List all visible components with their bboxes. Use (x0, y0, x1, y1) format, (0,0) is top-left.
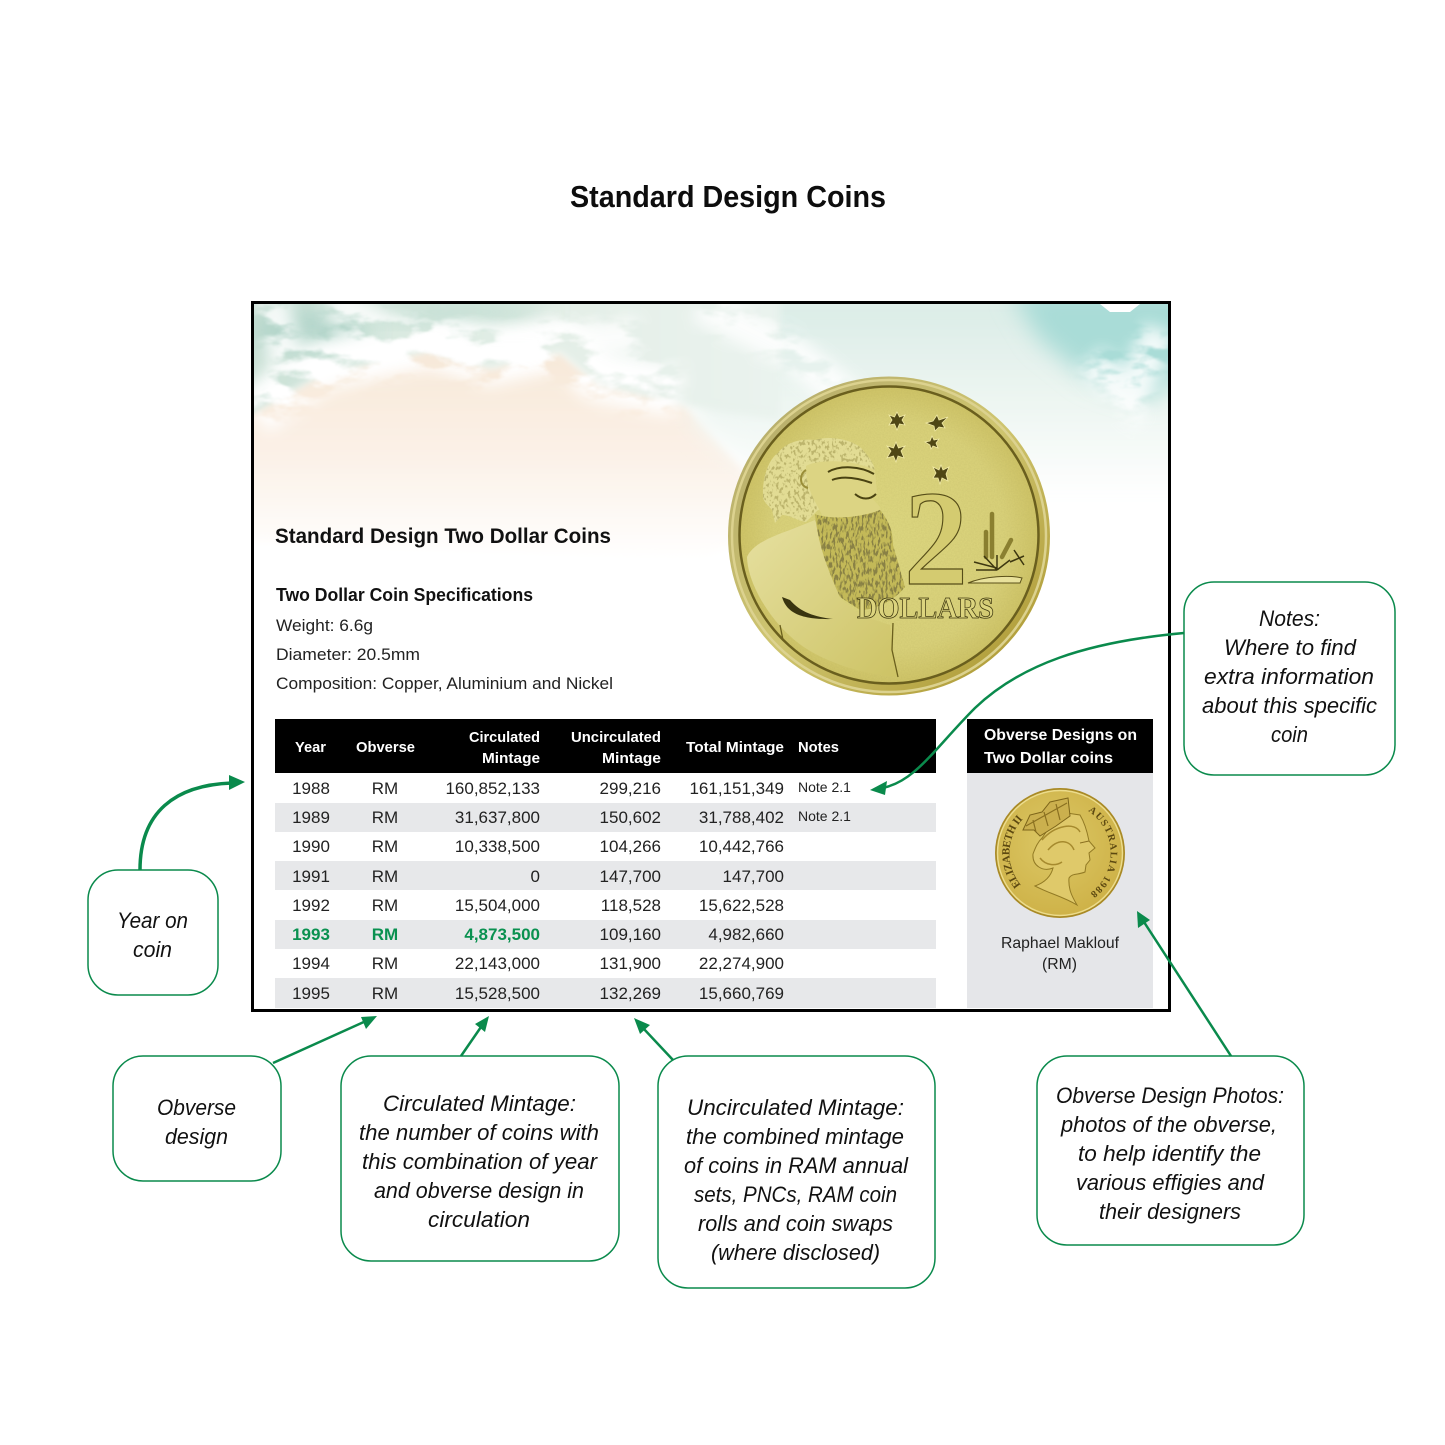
portrait: hair, shoulder, head and beard (747, 438, 905, 677)
row 1991: 0 (531, 867, 540, 886)
row 1993 highlighted: 4,873,500 (464, 925, 540, 944)
row 1994 (292, 954, 784, 973)
callout: circulated mintage: the number of coins with (359, 1120, 599, 1145)
row 1990: 10,338,500 (455, 837, 540, 856)
plant emblem (968, 514, 1024, 583)
row 1989: 31,637,800 (455, 808, 540, 827)
row 1992: RM (372, 896, 398, 915)
row 1995: 15,660,769 (699, 984, 784, 1003)
row 1994: 22,274,900 (699, 954, 784, 973)
callout: notes: Notes: (1259, 606, 1320, 631)
designer caption: Raphael Maklouf (1001, 935, 1120, 952)
row 1988: RM (372, 779, 398, 798)
callout: uncirculated mintage: of coins in RAM annual (684, 1153, 909, 1178)
callout: uncirculated mintage: the combined mintage (686, 1124, 904, 1149)
row 1993 highlighted (275, 920, 936, 949)
callout: obverse design photos: various effigies and (1076, 1170, 1265, 1195)
row 1989: 150,602 (600, 808, 661, 827)
callout: uncirculated mintage (658, 1056, 935, 1288)
row 1995: 15,528,500 (455, 984, 540, 1003)
row 1993 highlighted: RM (372, 925, 398, 944)
callout: year on coin: Year on (117, 908, 188, 933)
callout: circulated mintage: this combination of year (362, 1149, 599, 1174)
callout: obverse design photos (1037, 1056, 1304, 1245)
row 1992: 15,504,000 (455, 896, 540, 915)
row 1989: RM (372, 808, 398, 827)
panel: coin page frame (220, 290, 1200, 1010)
row 1995: 1995 (292, 984, 330, 1003)
stars (887, 412, 949, 484)
callout: notes: extra information (1204, 664, 1374, 689)
row 1988: 1988 (292, 779, 330, 798)
callout: year on coin (88, 870, 218, 995)
table header: Obverse (356, 739, 415, 756)
callout: year on coin: coin (133, 937, 172, 962)
callout: uncirculated mintage: (where disclosed) (711, 1240, 880, 1265)
arrow: obverse (273, 1016, 377, 1063)
row 1991: 1991 (292, 867, 330, 886)
arrow: year (140, 775, 245, 870)
text block: specifications: Composition: Copper, Aluminium and Nickel (276, 674, 613, 693)
row 1992 (292, 896, 784, 915)
row 1995: 132,269 (600, 984, 661, 1003)
text block: specifications: Two Dollar Coin Specifications (276, 585, 533, 605)
row 1991: 147,700 (723, 867, 784, 886)
panel heading: Two Dollar coins (984, 750, 1113, 767)
text block: specifications (276, 585, 613, 693)
arrow: circulated (461, 1016, 489, 1056)
row 1992: 1992 (292, 896, 330, 915)
icon: obverse coin with effigy: AUSTRALIA 1988 (1088, 807, 1118, 898)
row 1990 (292, 837, 784, 856)
row 1990: 10,442,766 (699, 837, 784, 856)
row 1993 highlighted: 1993 (292, 925, 330, 944)
callout: circulated mintage: Circulated Mintage: (383, 1091, 576, 1116)
beach background image (254, 304, 1168, 524)
text block: specifications: Diameter: 20.5mm (276, 645, 420, 664)
row 1988 (292, 779, 851, 798)
row 1994: RM (372, 954, 398, 973)
callout: obverse design photos: photos of the obverse, (1060, 1112, 1277, 1137)
arrow: notes to table (870, 633, 1184, 795)
table header: Mintage (482, 750, 540, 767)
table: mintage by year (275, 719, 936, 1008)
row 1992: 118,528 (601, 896, 661, 915)
row 1995 (275, 978, 936, 1008)
callout: uncirculated mintage: rolls and coin swaps (698, 1211, 893, 1236)
row 1994: 1994 (292, 954, 330, 973)
row 1989: Note 2.1 (798, 808, 851, 824)
heading: standard design two dollar coins: Standard Design Two Dollar Coins (275, 525, 611, 548)
row 1993 highlighted: 4,982,660 (708, 925, 784, 944)
row 1990: RM (372, 837, 398, 856)
frame border (252, 302, 1170, 1010)
row 1990: 104,266 (600, 837, 661, 856)
table header: Mintage (602, 750, 661, 767)
row 1989: 1989 (292, 808, 330, 827)
row 1991 (275, 861, 936, 890)
callout: circulated mintage (341, 1056, 619, 1261)
callout: obverse design photos: to help identify the (1078, 1141, 1261, 1166)
callout: obverse design: design (165, 1124, 228, 1149)
title: Standard Design Coins (570, 179, 886, 214)
main coin: two dollar reverse (728, 376, 1050, 696)
row 1992: 15,622,528 (699, 896, 784, 915)
callout: obverse design (113, 1056, 281, 1181)
designer caption: (RM) (1042, 956, 1077, 973)
row 1988: 161,151,349 (689, 779, 784, 798)
table header: Total Mintage (686, 739, 784, 756)
table header: Circulated (469, 729, 540, 746)
table header: Notes (798, 739, 839, 756)
text block: specifications: Weight: 6.6g (276, 616, 373, 635)
table header: Uncirculated (571, 729, 661, 746)
row 1995: RM (372, 984, 398, 1003)
table header: Year (295, 739, 326, 756)
panel: obverse designs (967, 719, 1153, 1008)
callout: notes: Where to find (1224, 635, 1357, 660)
callout: obverse design photos: their designers (1099, 1199, 1241, 1224)
callout: uncirculated mintage: sets, PNCs, RAM coin (694, 1182, 897, 1207)
callout: obverse design photos: Obverse Design Photos: (1056, 1083, 1284, 1108)
row 1988: Note 2.1 (798, 779, 851, 795)
panel heading: Obverse Designs on (984, 727, 1137, 744)
callout: notes: about this specific (1202, 693, 1377, 718)
row 1990: 1990 (292, 837, 330, 856)
denomination numeral: 2 (904, 464, 968, 614)
callout: obverse design: Obverse (157, 1095, 236, 1120)
arrow: uncirculated (634, 1018, 673, 1060)
icon: obverse coin with effigy (995, 788, 1125, 918)
row 1993 highlighted: 109,160 (600, 925, 661, 944)
row 1989 (275, 803, 936, 832)
row 1994: 131,900 (600, 954, 661, 973)
row 1988: 299,216 (600, 779, 661, 798)
arrow: obverse photos (1137, 911, 1231, 1056)
icon: obverse coin with effigy: ELIZABETH II (1002, 814, 1023, 889)
row 1991: 147,700 (600, 867, 661, 886)
row 1989: 31,788,402 (699, 808, 784, 827)
row 1988: 160,852,133 (445, 779, 540, 798)
row 1994: 22,143,000 (455, 954, 540, 973)
callout: notes (1184, 582, 1395, 775)
panel heading (984, 727, 1137, 767)
callout: uncirculated mintage: Uncirculated Mintage: (687, 1095, 904, 1120)
table header (275, 719, 936, 773)
coin wording: DOLLARS (857, 590, 994, 625)
row 1991: RM (372, 867, 398, 886)
designer caption (1001, 935, 1120, 973)
callout: circulated mintage: circulation (428, 1207, 530, 1232)
callout: notes: coin (1271, 722, 1308, 747)
callout: circulated mintage: and obverse design in (374, 1178, 584, 1203)
